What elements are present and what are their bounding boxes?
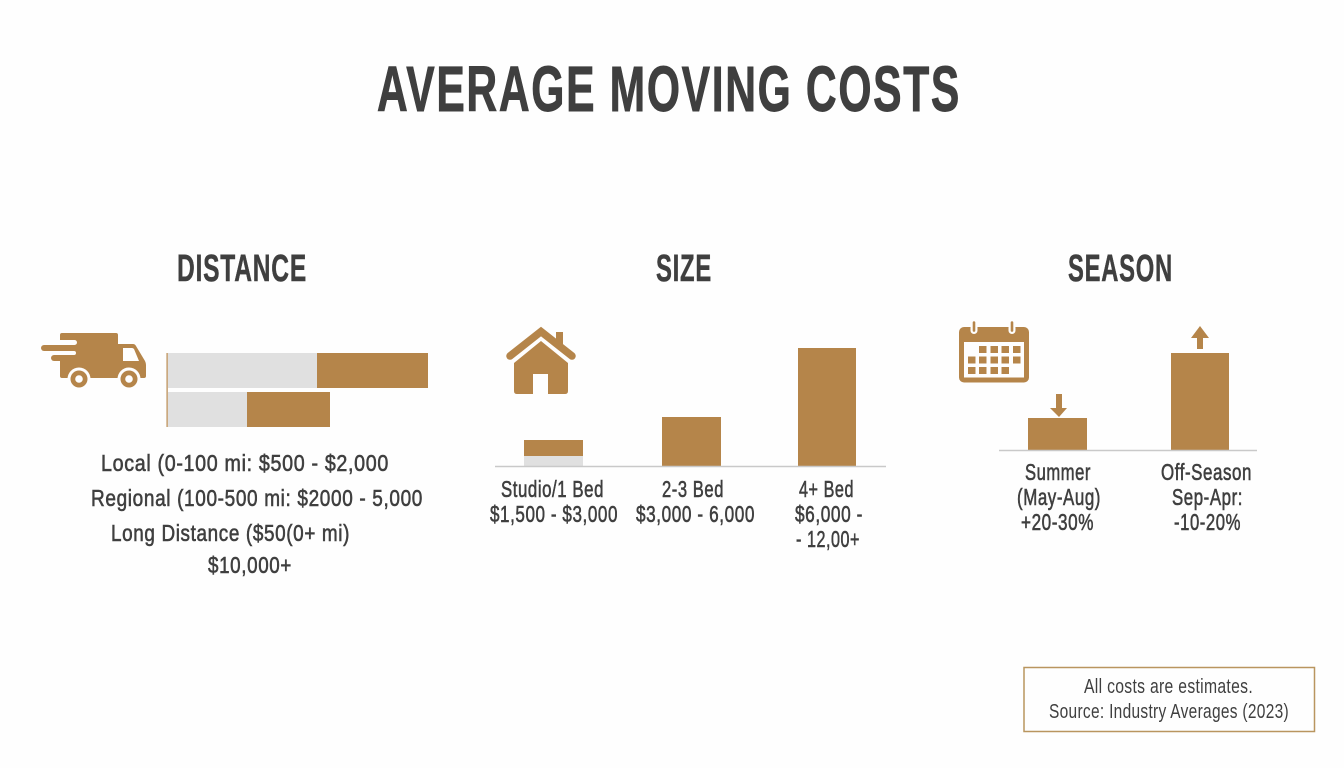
text: size cost labels [490, 476, 863, 552]
text: season labels: Sep-Apr: [1172, 484, 1243, 510]
text: distance cost labels: $10,000+ [208, 552, 292, 578]
icon: house [510, 332, 572, 394]
text: size cost labels: Studio/1 Bed [501, 476, 604, 502]
bar chart: seasonal change [999, 353, 1257, 450]
text: season labels: -10-20% [1174, 509, 1241, 535]
text: size cost labels: $3,000 - 6,000 [636, 501, 755, 527]
bar chart: distance ranges [166, 353, 428, 427]
callout: source note: All costs are estimates. [1084, 675, 1253, 698]
icon: calendar [959, 322, 1029, 382]
text: season labels: +20-30% [1021, 509, 1094, 535]
text: distance cost labels: Local (0-100 mi: $500 - $2,000 [101, 450, 389, 476]
heading: season: SEASON [1068, 248, 1173, 290]
text: season labels: Off-Season [1161, 459, 1252, 485]
text: distance cost labels: Long Distance ($50(0+ mi) [111, 520, 350, 546]
text: season labels [1017, 459, 1252, 535]
panel: season [959, 248, 1257, 535]
text: size cost labels: - 12,00+ [796, 526, 860, 552]
text: size cost labels: 4+ Bed [799, 476, 854, 502]
text: size cost labels: 2-3 Bed [662, 476, 724, 502]
text: season labels: Summer [1025, 459, 1091, 485]
text: distance cost labels: Regional (100-500 mi: $2000 - 5,000 [91, 485, 423, 511]
arrow: up [1191, 326, 1209, 349]
callout: source note [1024, 668, 1314, 732]
arrow: down [1050, 394, 1067, 417]
title: AVERAGE MOVING COSTS [377, 53, 961, 125]
text: distance cost labels [91, 450, 423, 578]
panel: size [490, 248, 886, 552]
panel: distance [40, 248, 428, 578]
heading: distance: DISTANCE [177, 248, 307, 290]
text: size cost labels: $1,500 - $3,000 [490, 501, 618, 527]
text: size cost labels: $6,000 - [795, 501, 863, 527]
text: season labels: (May-Aug) [1017, 484, 1101, 510]
icon: moving truck [40, 333, 146, 390]
bar chart: home size [495, 348, 886, 466]
heading: size: SIZE [656, 248, 712, 290]
